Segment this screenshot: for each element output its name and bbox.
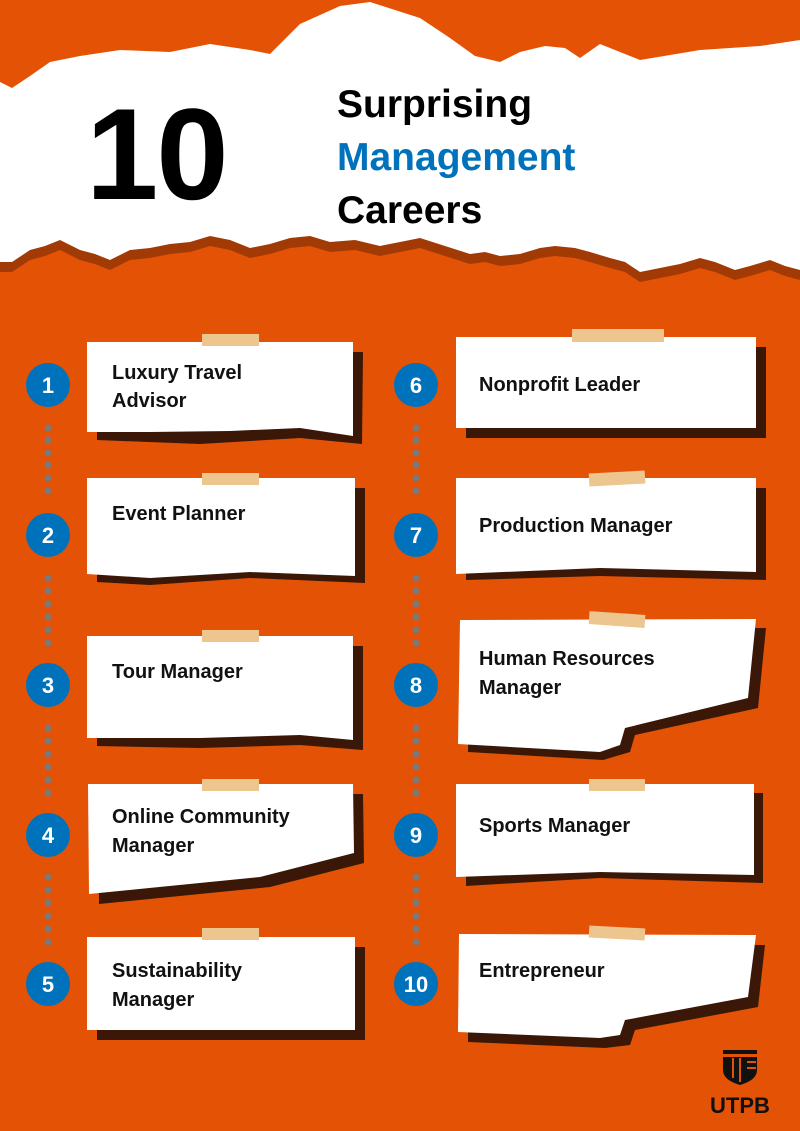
title number 10: 10 [86,81,227,227]
card 4 [88,779,364,904]
number badges: 4 [42,823,55,848]
number badges: 5 [42,972,54,997]
title text: Careers [337,189,482,232]
card 5: Manager [112,989,194,1011]
logo: UTPB [710,1050,770,1118]
card 2: Event Planner [112,503,246,525]
card 6: Nonprofit Leader [479,374,640,396]
number badges: 1 [42,373,54,398]
card 3: Tour Manager [112,661,243,683]
card 8 [458,611,766,760]
card 10 [458,926,765,1048]
card 8: Human Resources [479,648,655,670]
card 5: Sustainability [112,960,243,982]
card 6 [456,329,766,438]
title text: Surprising [337,83,532,126]
number badges: 3 [42,673,54,698]
header torn white band [0,2,800,282]
logo: UTPB: UTPB [710,1093,770,1118]
card 4: Online Community [112,806,291,828]
card 9 [456,779,763,886]
card 7 [456,471,766,580]
card 5 [87,928,365,1040]
card 9: Sports Manager [479,815,630,837]
card 1 [87,334,363,444]
title text [337,83,575,232]
number badges: 10 [404,972,428,997]
card 3 [87,630,363,750]
number badges [26,363,438,1006]
card 10: Entrepreneur [479,960,605,982]
card 4: Manager [112,835,194,857]
card 8: Manager [479,677,561,699]
number badges: 7 [410,523,422,548]
number badges: 8 [410,673,422,698]
title text: Management [337,136,575,179]
number badges: 6 [410,373,422,398]
card 7: Production Manager [479,515,673,537]
card 2 [87,473,365,585]
card 1: Luxury Travel [112,362,242,384]
number badges: 9 [410,823,422,848]
card 1: Advisor [112,390,187,412]
dotted connectors [44,424,420,946]
number badges: 2 [42,523,54,548]
